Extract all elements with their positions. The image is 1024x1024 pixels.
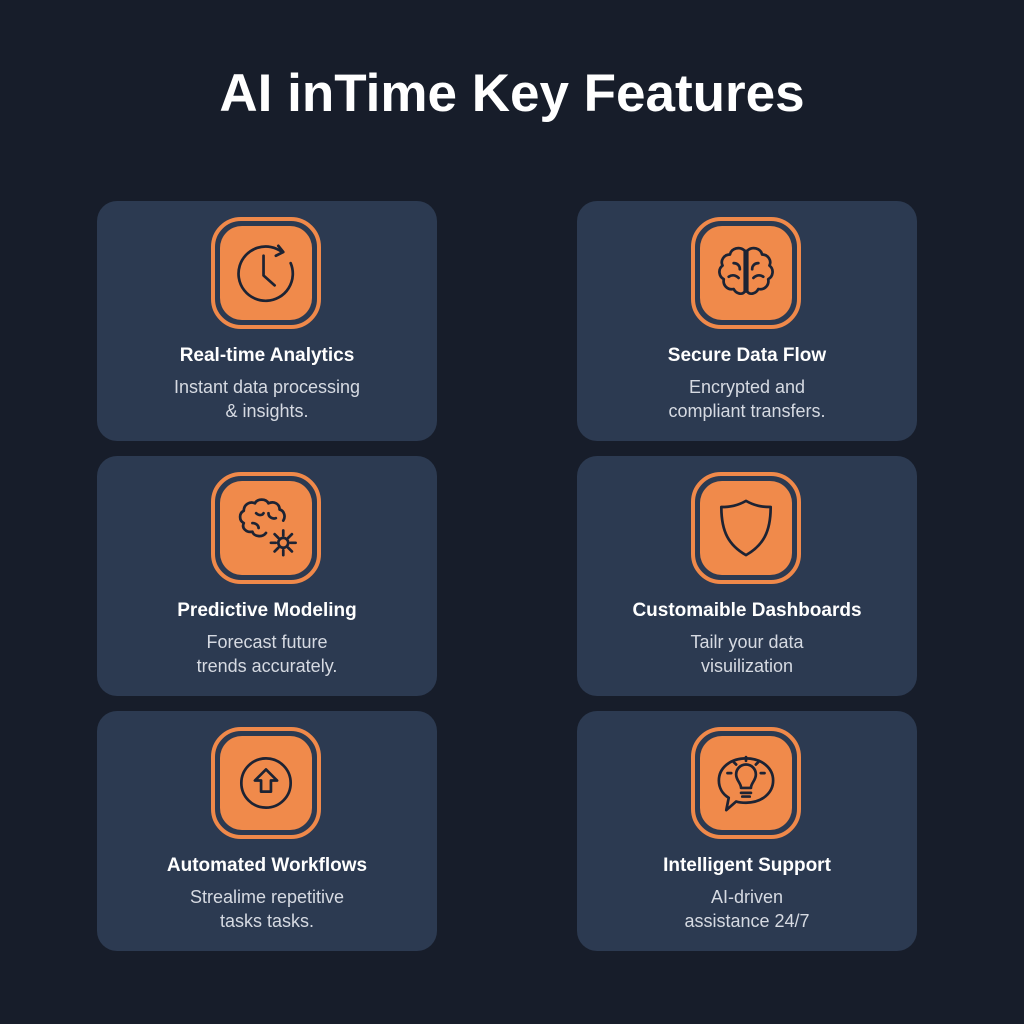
panel: intelligent support [577, 711, 917, 951]
description [690, 632, 804, 676]
panel: secure data flow [577, 201, 917, 441]
description [196, 632, 337, 676]
icon: upload circle [211, 727, 321, 839]
description [174, 377, 360, 421]
heading: Real-time Analytics [180, 345, 354, 366]
heading: Automated Workflows [167, 855, 367, 876]
description: visuilization [701, 656, 793, 676]
description: Forecast future [206, 632, 328, 652]
description [190, 887, 344, 931]
description: & insights. [225, 401, 309, 421]
description: trends accurately. [197, 656, 337, 676]
heading: Secure Data Flow [668, 345, 826, 366]
description: compliant transfers. [668, 401, 826, 421]
panel: automated workflows [97, 711, 437, 951]
description: AI-driven [711, 887, 783, 907]
description [668, 377, 826, 421]
heading: Customaible Dashboards [632, 600, 862, 621]
description: Strealime repetitive [190, 887, 344, 907]
description: assistance 24/7 [684, 911, 810, 931]
icon: speech bubble with bulb [691, 727, 801, 839]
description: Instant data processing [174, 377, 360, 397]
panel: predictive modeling [97, 456, 437, 696]
icon: brain [691, 217, 801, 329]
icon: clock [211, 217, 321, 329]
description: Encrypted and [689, 377, 805, 397]
icon: brain with gear [211, 472, 321, 584]
heading: Predictive Modeling [177, 600, 357, 621]
panel: customizable dashboards [577, 456, 917, 696]
description: tasks tasks. [220, 911, 314, 931]
description [684, 887, 810, 931]
icon: shield [691, 472, 801, 584]
panel: real-time analytics [97, 201, 437, 441]
heading: Intelligent Support [663, 855, 831, 876]
title: AI inTime Key Features [219, 64, 805, 123]
description: Tailr your data [690, 632, 804, 652]
